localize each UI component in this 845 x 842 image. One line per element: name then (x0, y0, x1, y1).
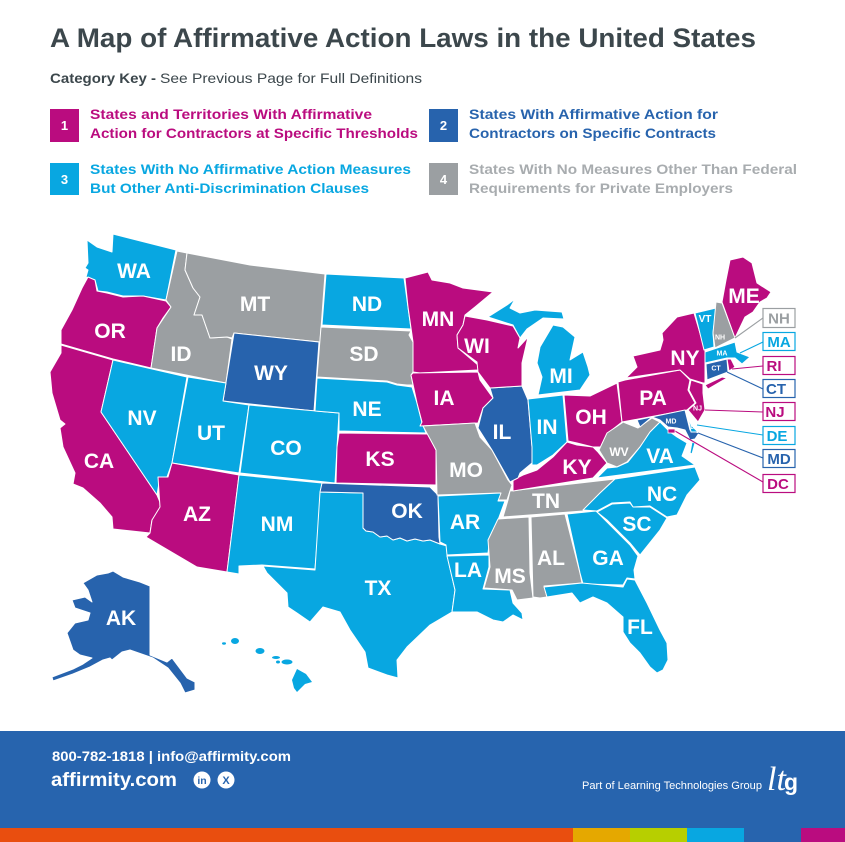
state: CO (240, 405, 339, 483)
state: MS (484, 517, 533, 600)
state: AL (531, 514, 582, 598)
state: FL (544, 579, 668, 673)
legend: category 3 (50, 161, 411, 196)
callout: CT (727, 372, 795, 398)
icon: X: X (222, 775, 230, 787)
state: NV (101, 360, 187, 495)
state: LA (447, 555, 523, 622)
state: TN: TN (532, 490, 560, 513)
callout: DC (668, 429, 795, 493)
state: MS: MS (494, 565, 526, 588)
state: NV: NV (127, 407, 157, 430)
state: NE: NE (352, 398, 382, 421)
state: MI lower peninsula: MI (549, 365, 573, 388)
state: ME: ME (728, 285, 760, 308)
parent company line: Part of Learning Technologies Group (582, 780, 762, 792)
state: CA: CA (84, 450, 114, 473)
callout: NJ (705, 402, 795, 421)
state: IL: IL (493, 421, 511, 444)
callout: MA: MA (767, 334, 791, 351)
state: PA: PA (639, 387, 667, 410)
legend: category 4: 4 (440, 172, 448, 187)
state: NH (713, 302, 735, 348)
footer contact line: 800-782-1818 | info@affirmity.com (52, 749, 291, 764)
state: OK: OK (391, 500, 423, 523)
legend: category 1: Action for Contractors at Specific Thresholds (90, 125, 418, 141)
footer colour strip (0, 828, 845, 842)
callout: NH (735, 308, 795, 338)
state: MD: MD (666, 418, 676, 426)
state: MI upper peninsula (488, 299, 564, 338)
state: WV (599, 418, 660, 467)
callout: CT: CT (766, 381, 786, 398)
icon: X (218, 772, 234, 788)
state: ID: ID (170, 343, 192, 366)
state: AZ (146, 463, 239, 572)
footer band (0, 731, 845, 828)
category key subtitle (50, 70, 422, 86)
legend: category 4: Requirements for Private Employers (469, 180, 733, 196)
ltg logo (767, 761, 798, 798)
title: A Map of Affirmative Action Laws in the United States (50, 23, 756, 53)
state: NH: NH (715, 334, 725, 342)
category key subtitle: See Previous Page for Full Definitions (160, 70, 422, 86)
state: NM: NM (261, 513, 293, 536)
legend: category 3: States With No Affirmative Action Measures (90, 161, 411, 177)
state: MA (705, 342, 750, 364)
state: GA (567, 511, 638, 585)
state: AR (438, 493, 505, 555)
state: AL: AL (537, 547, 565, 570)
state: VA: VA (646, 445, 674, 468)
category key subtitle: Category Key - (50, 70, 156, 86)
state: CA (50, 345, 162, 533)
state: NY Long Island (705, 377, 727, 389)
state: WI: WI (464, 335, 490, 358)
state: WV: WV (609, 445, 629, 459)
state: AR: AR (450, 511, 480, 534)
state: AZ: AZ (183, 503, 211, 526)
callout: RI (732, 356, 795, 375)
state: WY: WY (254, 362, 288, 385)
state: IA: IA (434, 387, 454, 410)
callout: NH: NH (768, 310, 790, 328)
callout: NJ: NJ (765, 404, 785, 421)
legend: category 2: 2 (440, 118, 447, 133)
legend: category 1: 1 (61, 118, 68, 133)
state: MN: MN (422, 308, 454, 331)
state: CO: CO (270, 437, 302, 460)
legend: category 4 (429, 161, 797, 196)
state: CT (706, 359, 728, 380)
state: DE: DE (691, 425, 698, 431)
state: LA: LA (454, 559, 482, 582)
state: KY (513, 442, 607, 491)
state: VT (695, 308, 716, 350)
state: ND: ND (352, 293, 382, 316)
legend: category 3: 3 (61, 172, 68, 187)
state: OR (61, 277, 171, 368)
legend: category 2: States With Affirmative Action for (469, 106, 719, 122)
state: NJ: NJ (693, 406, 702, 412)
legend: category 2: Contractors on Specific Contracts (469, 125, 716, 141)
state: IN: IN (536, 416, 558, 439)
state: CT: CT (711, 366, 721, 372)
state: UT (172, 377, 249, 473)
state: SC: SC (622, 513, 652, 536)
state: IA (411, 372, 493, 426)
callout: RI: RI (766, 358, 782, 375)
state: KS (336, 433, 436, 485)
state: NC (583, 467, 700, 517)
state: MN (405, 272, 493, 373)
state: MO (423, 423, 512, 500)
footer website: affirmity.com (51, 770, 177, 791)
state: NY: NY (670, 347, 700, 370)
state: DE (687, 412, 698, 432)
callout: MD (698, 433, 795, 468)
state: WA: WA (117, 260, 151, 283)
state: NY (626, 313, 705, 383)
state: OH (564, 383, 622, 447)
state: OR: OR (94, 320, 126, 343)
state: KS: KS (365, 448, 395, 471)
callout: MA (740, 332, 795, 353)
ltg logo: g (784, 769, 798, 795)
state: NC: NC (647, 483, 677, 506)
state: MT: MT (240, 293, 270, 316)
state: MD (637, 410, 699, 440)
state: NJ (688, 380, 705, 422)
icon: LinkedIn: in (197, 775, 207, 787)
state: FL: FL (627, 616, 653, 639)
legend: category 1 (50, 106, 418, 142)
legend: category 4: States With No Measures Other Than Federal (469, 161, 797, 177)
callout: DE (697, 425, 795, 445)
state: SD (317, 327, 413, 385)
state: OK (320, 483, 440, 544)
state: TN (503, 479, 615, 517)
legend: category 3: But Other Anti-Discrimination Clauses (90, 180, 369, 196)
state: ND (322, 274, 411, 329)
state: NE (315, 378, 426, 433)
state: KY: KY (562, 456, 592, 479)
state: MI lower peninsula (537, 325, 590, 395)
ltg logo: lt (767, 761, 787, 798)
state: ME (722, 257, 771, 338)
state: IN (528, 395, 567, 465)
state: AK: AK (106, 607, 136, 630)
callout: DE: DE (767, 428, 787, 445)
state: TX: TX (365, 577, 391, 600)
state: VA (597, 422, 695, 478)
state: AK (52, 571, 195, 693)
state: UT: UT (197, 422, 225, 445)
state: PA (618, 370, 695, 422)
state: NM (227, 475, 322, 574)
state: OH: OH (575, 406, 607, 429)
callout: DC: DC (767, 476, 789, 493)
state: WA (85, 234, 176, 300)
state: WI (457, 316, 528, 388)
state: TX (263, 492, 455, 678)
state: ID (151, 251, 232, 383)
icon: LinkedIn (194, 772, 210, 788)
state: VT: VT (699, 314, 711, 325)
state: MO: MO (449, 459, 483, 482)
state: VA eastern shore (690, 442, 695, 454)
state: MA: MA (717, 350, 727, 358)
state: GA: GA (592, 547, 624, 570)
state: MT (185, 253, 325, 342)
state: SC (597, 503, 667, 555)
state: IL (478, 386, 532, 482)
small-state callouts (668, 308, 795, 493)
state: RI (727, 359, 735, 371)
state: HI (222, 638, 312, 692)
callout: MD: MD (767, 451, 791, 468)
map of the United States (50, 234, 771, 693)
legend: category 1: States and Territories With Affirmative (90, 106, 372, 122)
state: WY (223, 333, 319, 411)
state: SD: SD (349, 343, 379, 366)
legend: category 2 (429, 106, 719, 142)
